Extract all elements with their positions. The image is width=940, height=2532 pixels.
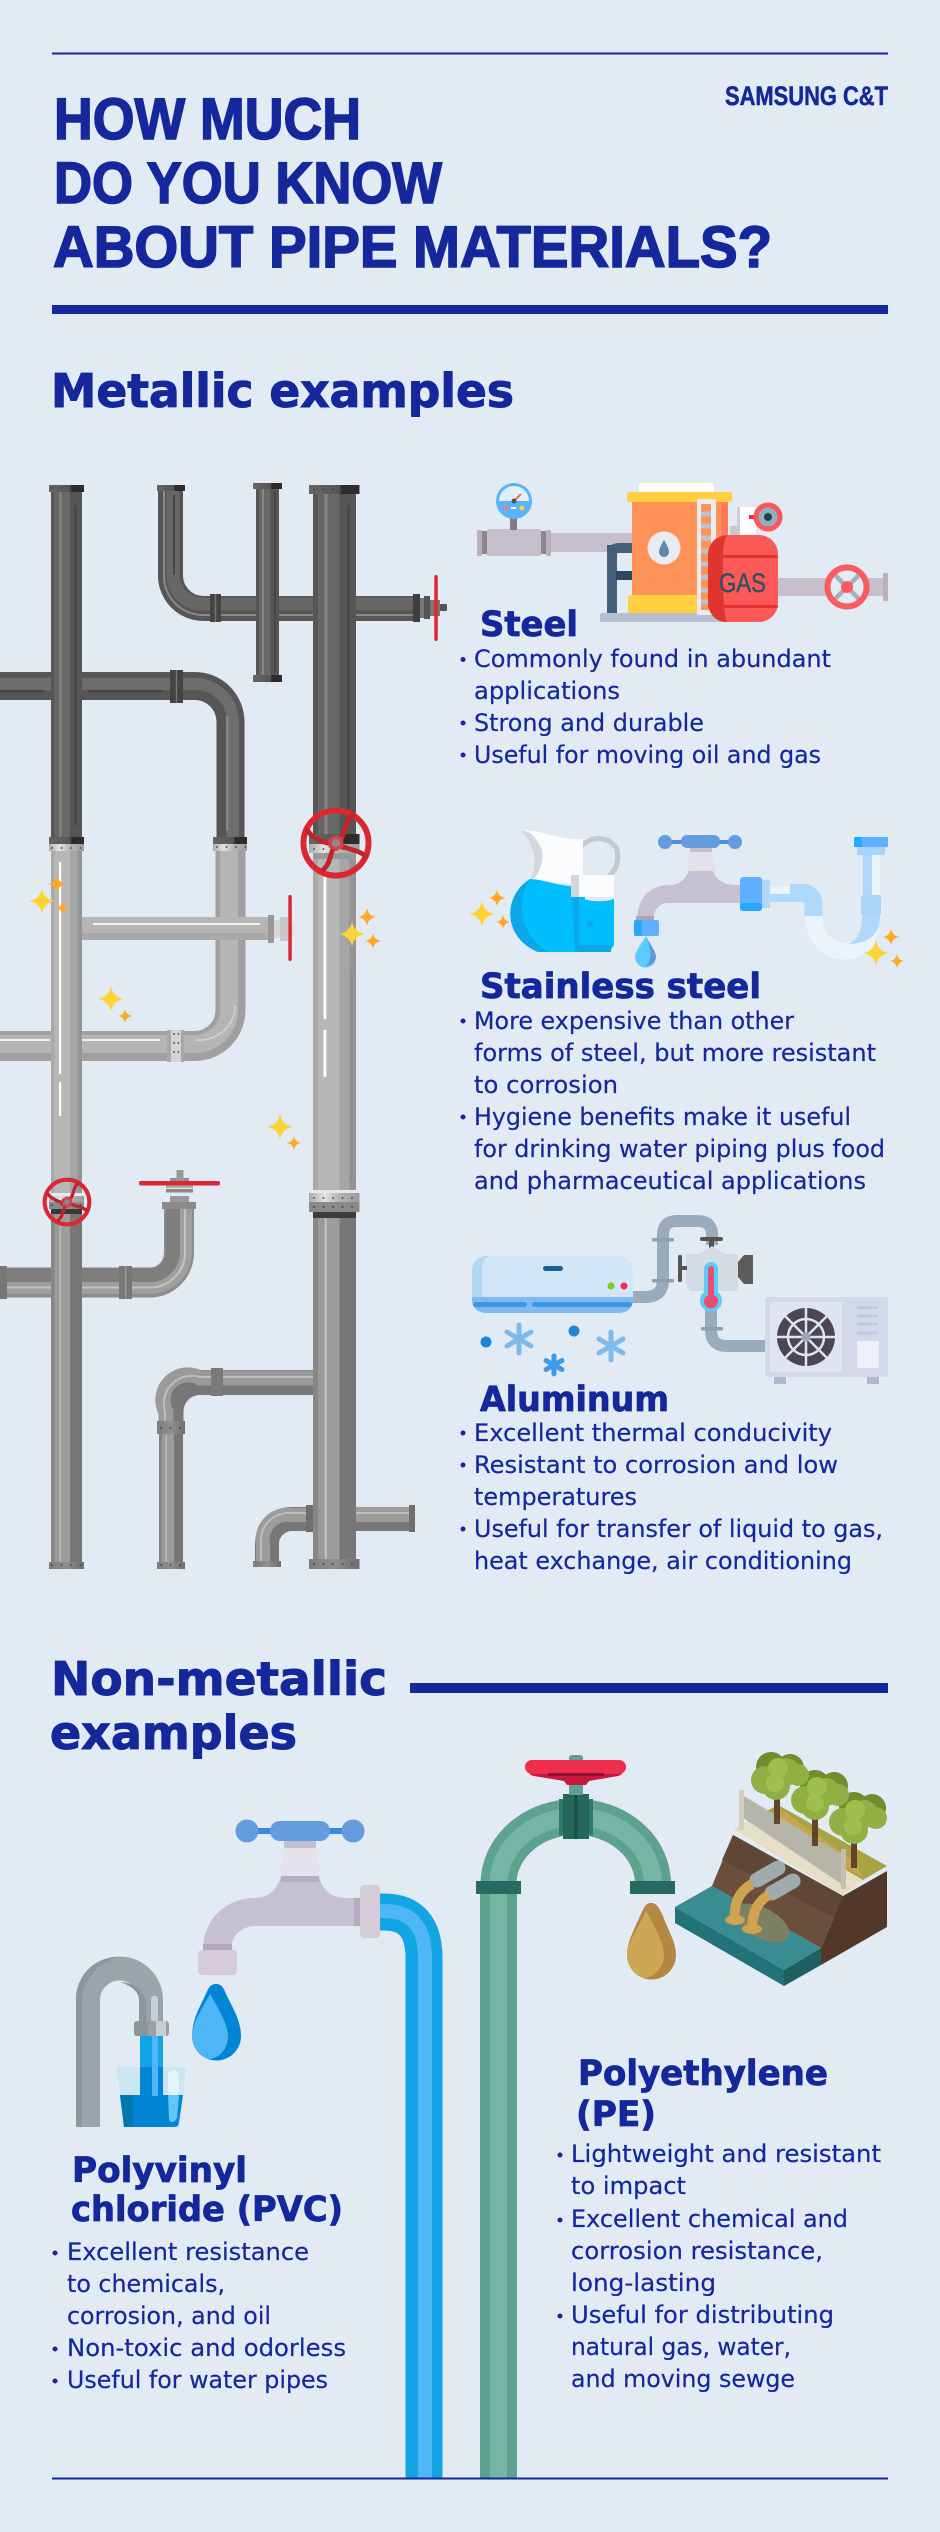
text block: PE bullets: natural gas, water, <box>571 2333 791 2361</box>
pipe: short dark vertical <box>253 483 282 682</box>
bottom rule <box>52 2478 888 2480</box>
icon: faucet <box>198 1820 380 1975</box>
text block: stainless steel bullets: Hygiene benefits make it useful <box>474 1103 851 1131</box>
icon: gas tank and pipes <box>477 483 888 622</box>
icon: sewage drop <box>627 1903 676 1979</box>
text block: aluminum bullets: temperatures <box>474 1483 637 1511</box>
title: DO YOU KNOW <box>54 151 442 216</box>
text block: PE bullets: and moving sewge <box>571 2365 795 2393</box>
icon: blue PVC pipe <box>378 1911 425 2478</box>
panel: polyethylene <box>476 1752 887 2478</box>
valve handle <box>288 895 292 961</box>
heading: Metallic examples: Metallic examples <box>51 364 514 418</box>
bolts <box>52 488 360 1565</box>
sparkles: right pipe <box>339 908 381 949</box>
text block: PE bullets <box>558 2140 881 2393</box>
valve handle <box>434 575 438 641</box>
text block: stainless steel bullets: for drinking water piping plus food <box>474 1135 885 1163</box>
text block: steel bullets: Useful for moving oil and gas <box>474 741 821 769</box>
sparkles: mid <box>98 986 132 1023</box>
heading: Non-metallic examples: examples <box>50 1706 297 1760</box>
text block: stainless steel bullets: More expensive than other <box>474 1007 794 1035</box>
sparkles: left pipe <box>29 875 70 915</box>
text block: PVC bullets: Excellent resistance <box>67 2238 309 2266</box>
text block: PE bullets: Excellent chemical and <box>571 2205 848 2233</box>
icon: tap and glass <box>76 1957 186 2127</box>
text block: PVC bullets: to chemicals, <box>67 2270 225 2298</box>
text block: stainless steel bullets: to corrosion <box>474 1071 618 1099</box>
text block: aluminum bullets: Useful for transfer of liquid to gas, <box>474 1515 883 1543</box>
pipe: lower left elbow with valve <box>0 1170 220 1299</box>
heading: Stainless steel: Stainless steel <box>480 967 761 1007</box>
text block: aluminum bullets <box>460 1419 883 1575</box>
panel: stainless steel <box>460 831 904 1195</box>
valve wheel: large <box>303 810 369 876</box>
text block: aluminum bullets: heat exchange, air conditioning <box>474 1547 852 1575</box>
heading: Non-metallic examples: Non-metallic <box>51 1652 387 1706</box>
text block: PVC bullets: Non-toxic and odorless <box>67 2334 346 2362</box>
chart: metallic pipe network illustration <box>0 483 447 1569</box>
pipe: left vertical main <box>49 485 84 1569</box>
text block: steel bullets: Strong and durable <box>474 709 704 737</box>
heading: Polyvinyl chloride (PVC): chloride (PVC) <box>71 2190 343 2230</box>
text block: PE bullets: corrosion resistance, <box>571 2237 823 2265</box>
title <box>53 87 772 280</box>
panel: steel <box>460 483 888 769</box>
pipe: upper dark long elbow <box>0 670 233 838</box>
icon: jug, faucet and trap <box>469 831 904 968</box>
valve handle <box>139 1181 220 1186</box>
heading: Steel: Steel <box>480 605 578 645</box>
pipe: lower elbow to main <box>157 1368 313 1569</box>
text block: PE bullets: long-lasting <box>571 2269 716 2297</box>
panel: polyvinyl chloride <box>52 1820 425 2478</box>
text block: PVC bullets: corrosion, and oil <box>67 2302 271 2330</box>
icon: air conditioner and outdoor unit <box>472 1221 888 1384</box>
text block: PE bullets: to impact <box>571 2172 686 2200</box>
icon: gas tank and pipes: GAS <box>719 568 766 598</box>
heading: Polyethylene (PE) <box>576 2054 828 2135</box>
heading: Aluminum: Aluminum <box>480 1380 669 1420</box>
text block: PE bullets: Useful for distributing <box>571 2301 834 2329</box>
text block: steel bullets <box>460 645 831 769</box>
pipe: light horizontal with valve <box>82 895 302 961</box>
panel: aluminum <box>460 1221 888 1575</box>
text block: aluminum bullets: Resistant to corrosion and low <box>474 1451 838 1479</box>
heading: Polyethylene (PE): Polyethylene <box>578 2054 828 2094</box>
text block: stainless steel bullets <box>460 1007 885 1195</box>
text block: stainless steel bullets: and pharmaceutical applications <box>474 1167 866 1195</box>
pipe: upper right dark elbow with valve <box>157 485 447 641</box>
text block: PVC bullets <box>52 2238 346 2394</box>
title rule <box>52 305 888 314</box>
top rule <box>52 52 888 54</box>
heading: Polyvinyl chloride (PVC): Polyvinyl <box>72 2151 247 2191</box>
icon: sewage outfall embankment <box>675 1752 887 1986</box>
heading: Polyvinyl chloride (PVC) <box>71 2151 343 2230</box>
title: HOW MUCH <box>54 87 361 152</box>
title: ABOUT PIPE MATERIALS? <box>53 215 772 280</box>
text block: PVC bullets: Useful for water pipes <box>67 2366 328 2394</box>
heading: Non-metallic examples <box>50 1652 387 1760</box>
logo: Samsung C&T: SAMSUNG C&T <box>725 81 888 111</box>
text block: aluminum bullets: Excellent thermal conducivity <box>474 1419 832 1447</box>
text block: stainless steel bullets: forms of steel, but more resistant <box>474 1039 876 1067</box>
heading rule <box>410 1683 888 1693</box>
text block: steel bullets: Commonly found in abundant <box>474 645 831 673</box>
icon: water drop <box>192 1984 241 2060</box>
pipe: light U section <box>0 837 247 1062</box>
icon: green PE pipe with valve <box>476 1755 675 2478</box>
pipe: bottom small elbow <box>253 1505 415 1567</box>
pipe: right large vertical main <box>309 485 360 1569</box>
text block: steel bullets: applications <box>474 677 620 705</box>
sparkles: lower <box>267 1114 301 1150</box>
heading: Polyethylene (PE): (PE) <box>576 2095 656 2135</box>
valve wheel: small <box>45 1180 89 1224</box>
text block: PE bullets: Lightweight and resistant <box>571 2140 881 2168</box>
